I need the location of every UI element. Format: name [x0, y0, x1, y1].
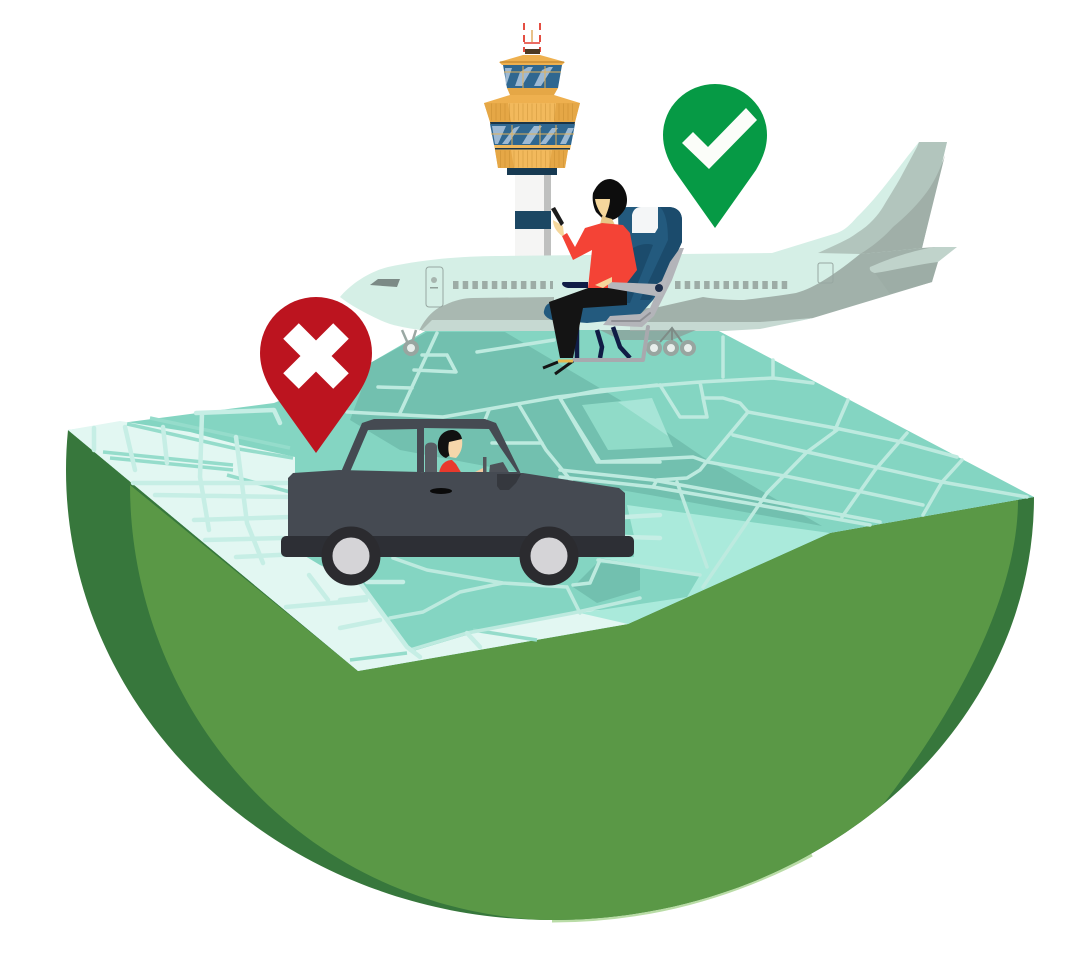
car driver: [425, 430, 510, 475]
control tower: [484, 23, 580, 257]
hemisphere: green globe base: [66, 430, 1034, 958]
tower cab: [484, 55, 580, 168]
location pin: green check: [663, 84, 767, 228]
tower shaft: [507, 168, 557, 257]
seat headrest: [632, 207, 658, 233]
tower antenna: [524, 23, 540, 54]
seat legs: [577, 326, 630, 358]
plane rear landing gear: [600, 328, 696, 354]
car mirror: [497, 474, 521, 490]
plane tail fin: [818, 142, 947, 254]
plane rear door: [818, 263, 833, 283]
car body: [288, 470, 625, 537]
woman passenger: [543, 179, 668, 374]
plane windows: [453, 281, 789, 289]
passenger black trousers: [549, 288, 627, 358]
plane horizontal stabilizer: [870, 247, 957, 294]
car bumper: [281, 536, 634, 557]
plane front door: [426, 267, 443, 307]
seat armrest: [562, 277, 668, 296]
car with driver: [281, 419, 634, 580]
seat metal frame: [574, 248, 684, 360]
passenger hand and phone: [551, 207, 564, 236]
plane cockpit window: [370, 279, 400, 287]
passenger shoes: [543, 361, 573, 374]
car front and rear wheels: [327, 532, 573, 580]
car roof and pillars: [341, 419, 521, 474]
seat back and cushion: [544, 207, 682, 323]
airplane: [340, 142, 957, 354]
map surface with streets: [68, 330, 1034, 671]
passenger red sweater: [562, 223, 637, 288]
location pin: red cross: [260, 297, 372, 453]
plane front landing gear: [402, 330, 417, 354]
plane fuselage: [340, 142, 947, 331]
passenger hair and face: [593, 179, 627, 225]
passenger seat: [544, 207, 684, 360]
car door handle: [430, 488, 452, 494]
